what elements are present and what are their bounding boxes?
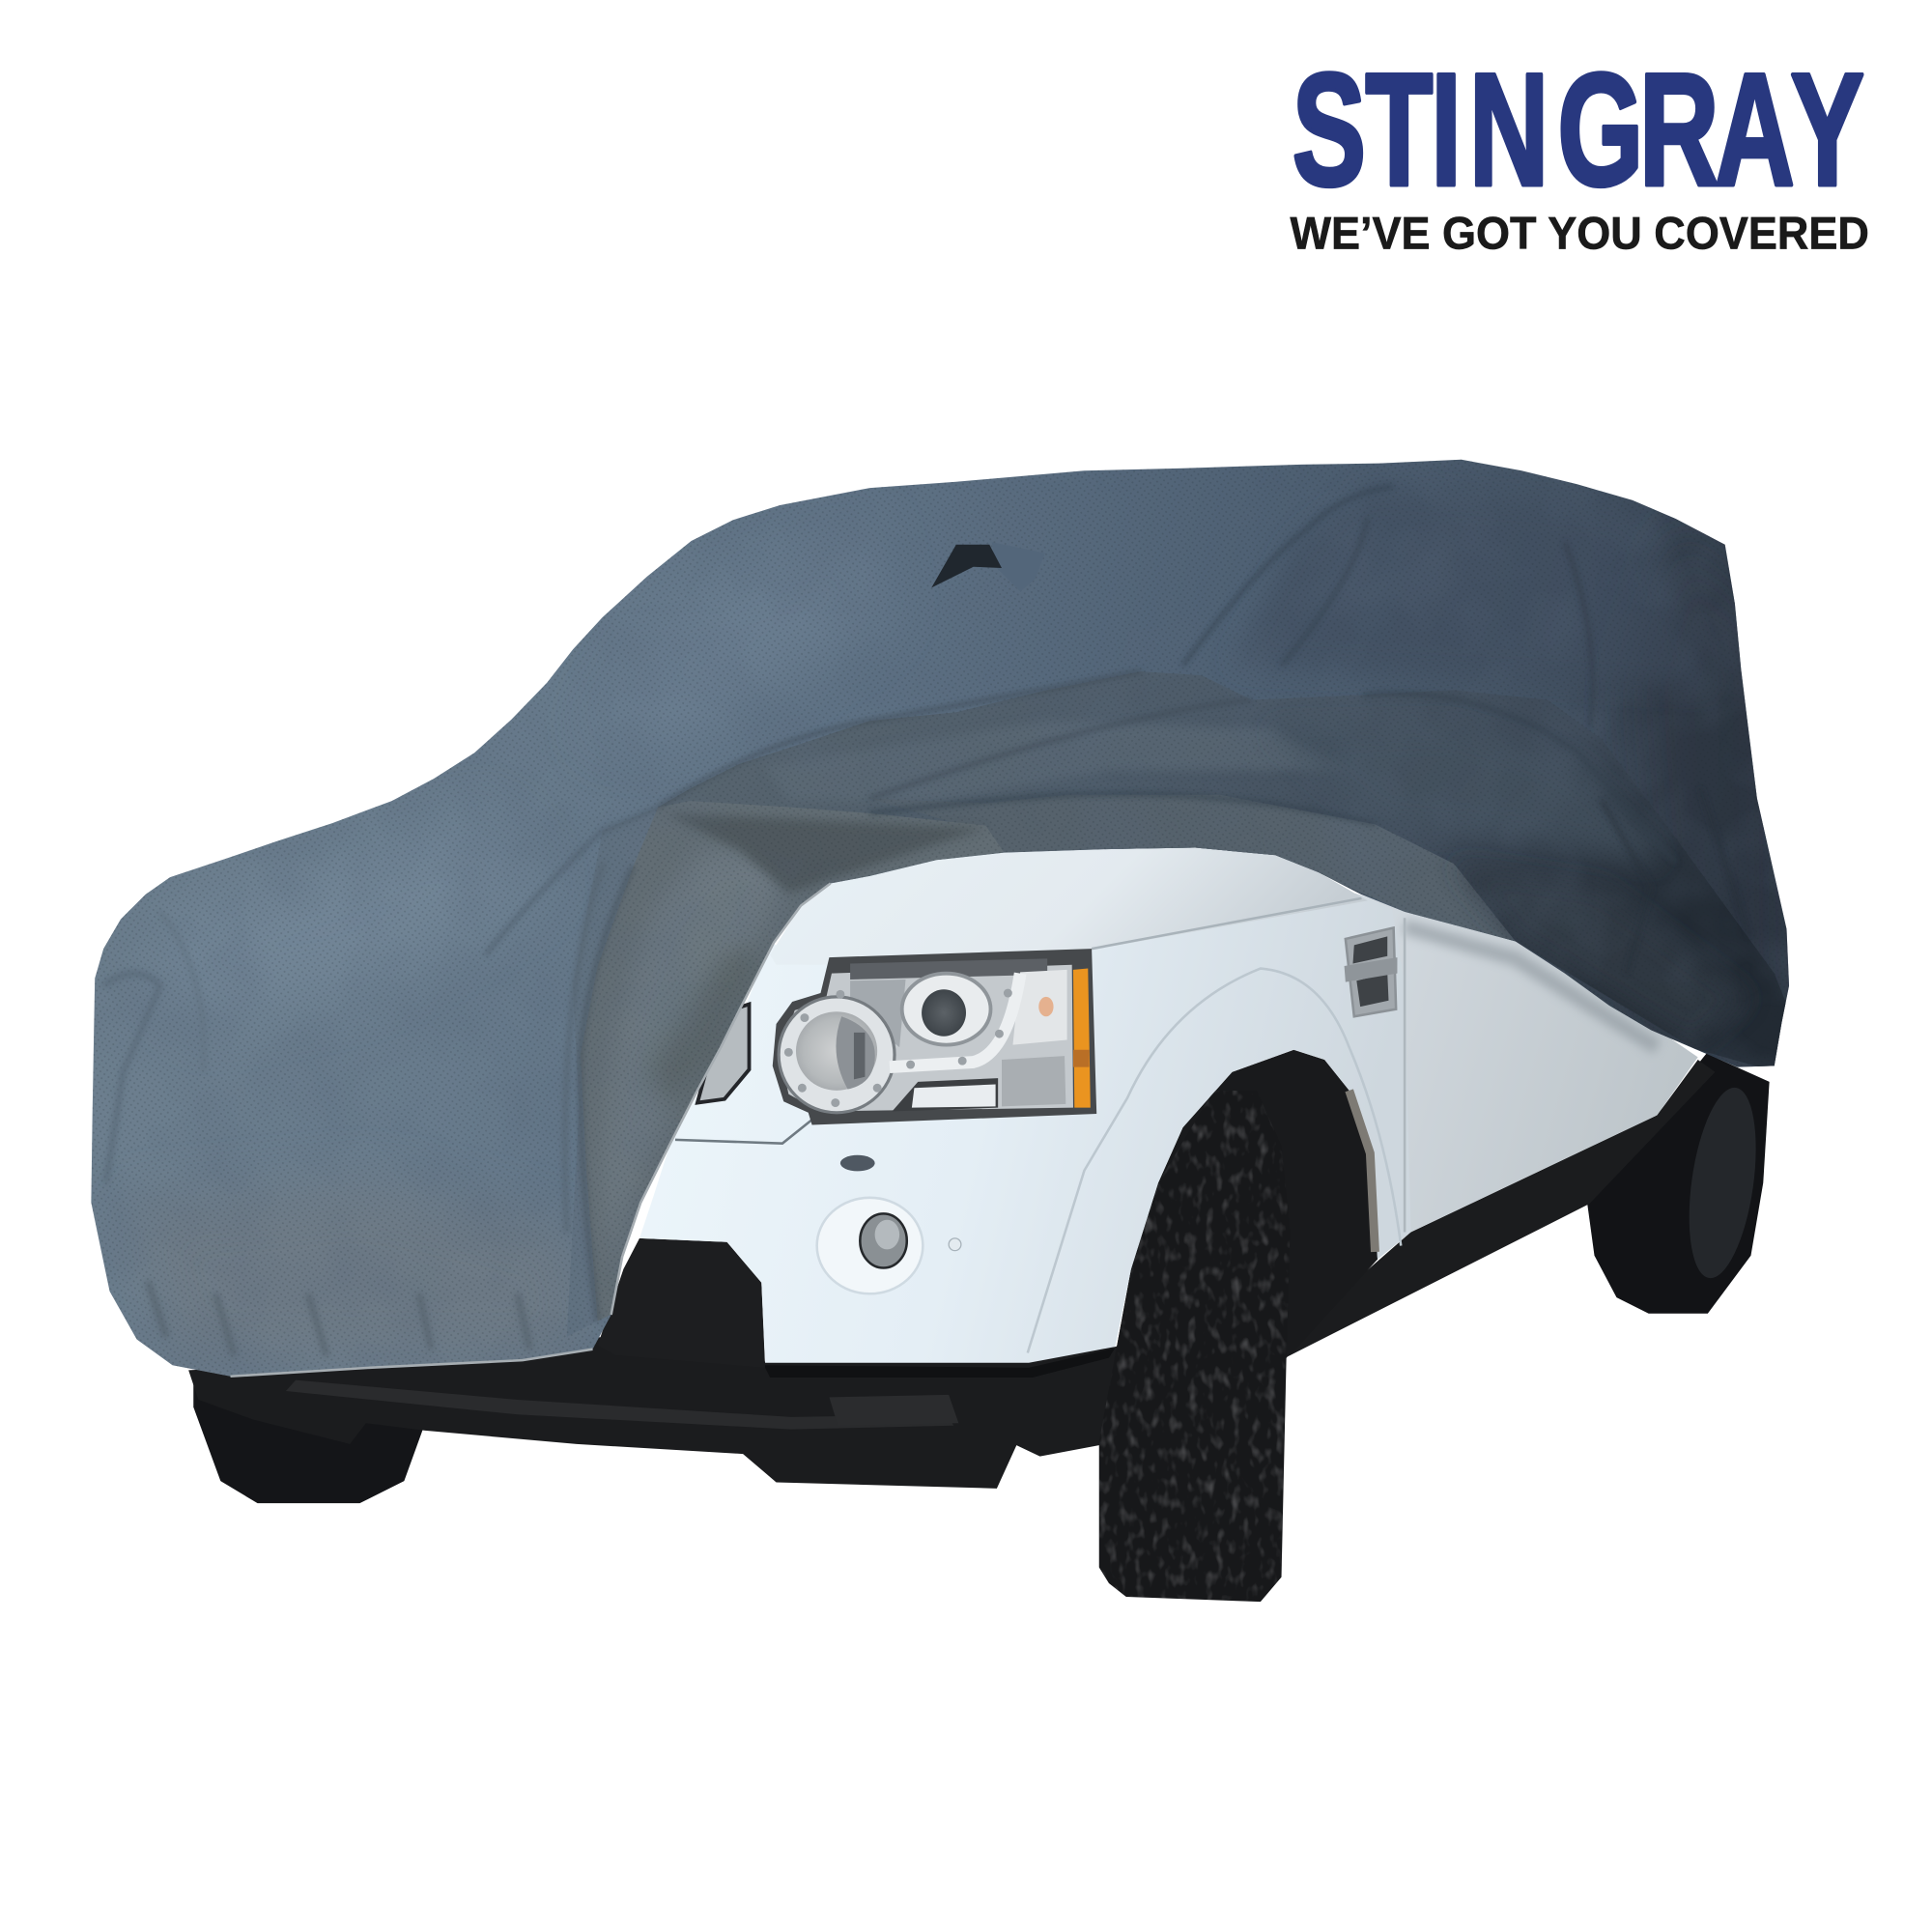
grille fragment beside headlight [697,1005,750,1103]
fog lamp [817,1198,923,1293]
parking sensor [949,1238,961,1251]
shadow under the cover hem [1405,926,1658,1047]
drape panel beside lining [567,822,642,1335]
car cover [74,443,1811,1392]
washer nozzle [840,1155,875,1171]
bonnet [770,848,1368,965]
wheel arch [1117,1050,1378,1355]
front-left wheel [193,1375,425,1503]
front bumper lip and vent [286,1348,1115,1430]
mirror pocket notch [931,542,1045,591]
photo: SUV partly under a grey car cover [74,443,1811,1608]
sheet ridge highlights [969,729,1308,784]
orange indicator [1073,969,1091,1108]
woven fabric texture [74,443,1811,1392]
white body side panel [1343,894,1698,1260]
sill and underbody [188,1060,1716,1489]
body shape lines [675,898,1405,1353]
cover fabric base [91,460,1789,1377]
front lining flap [581,801,1005,1321]
white fender and bumper [639,894,1410,1363]
lower front greyer cloth [158,1246,561,1370]
draped sheet over wing [658,671,1794,1072]
side vent [1345,927,1397,1016]
low beam lens [796,1011,877,1091]
roof panel folds [1252,502,1703,688]
drape fold lines [103,487,1749,1355]
dark reflector band [850,958,1047,980]
rear wheel [1587,1054,1770,1314]
lower lamp blocks [892,1078,998,1112]
chrome reflections [850,980,906,1047]
rear dark shading [1627,518,1799,1084]
bolts [784,989,1012,1107]
windscreen light patches [722,593,833,663]
daytime light ring [890,974,1020,1067]
brand name: STINGRAY [1293,41,1864,219]
lower sheet flap [985,795,1515,941]
tagline: WE’VE GOT YOU COVERED [1290,209,1869,260]
front tyre [1099,1090,1290,1602]
headlight [773,949,1096,1125]
logo: Stingray wordmark and tagline [1290,41,1869,260]
grille intake [598,1238,765,1368]
soft shading on bonnet [247,856,452,966]
cover hem stitching [231,884,831,1377]
low beam ring [779,997,895,1113]
mottled cloth shading [74,443,1811,1392]
projector lens [902,974,991,1045]
